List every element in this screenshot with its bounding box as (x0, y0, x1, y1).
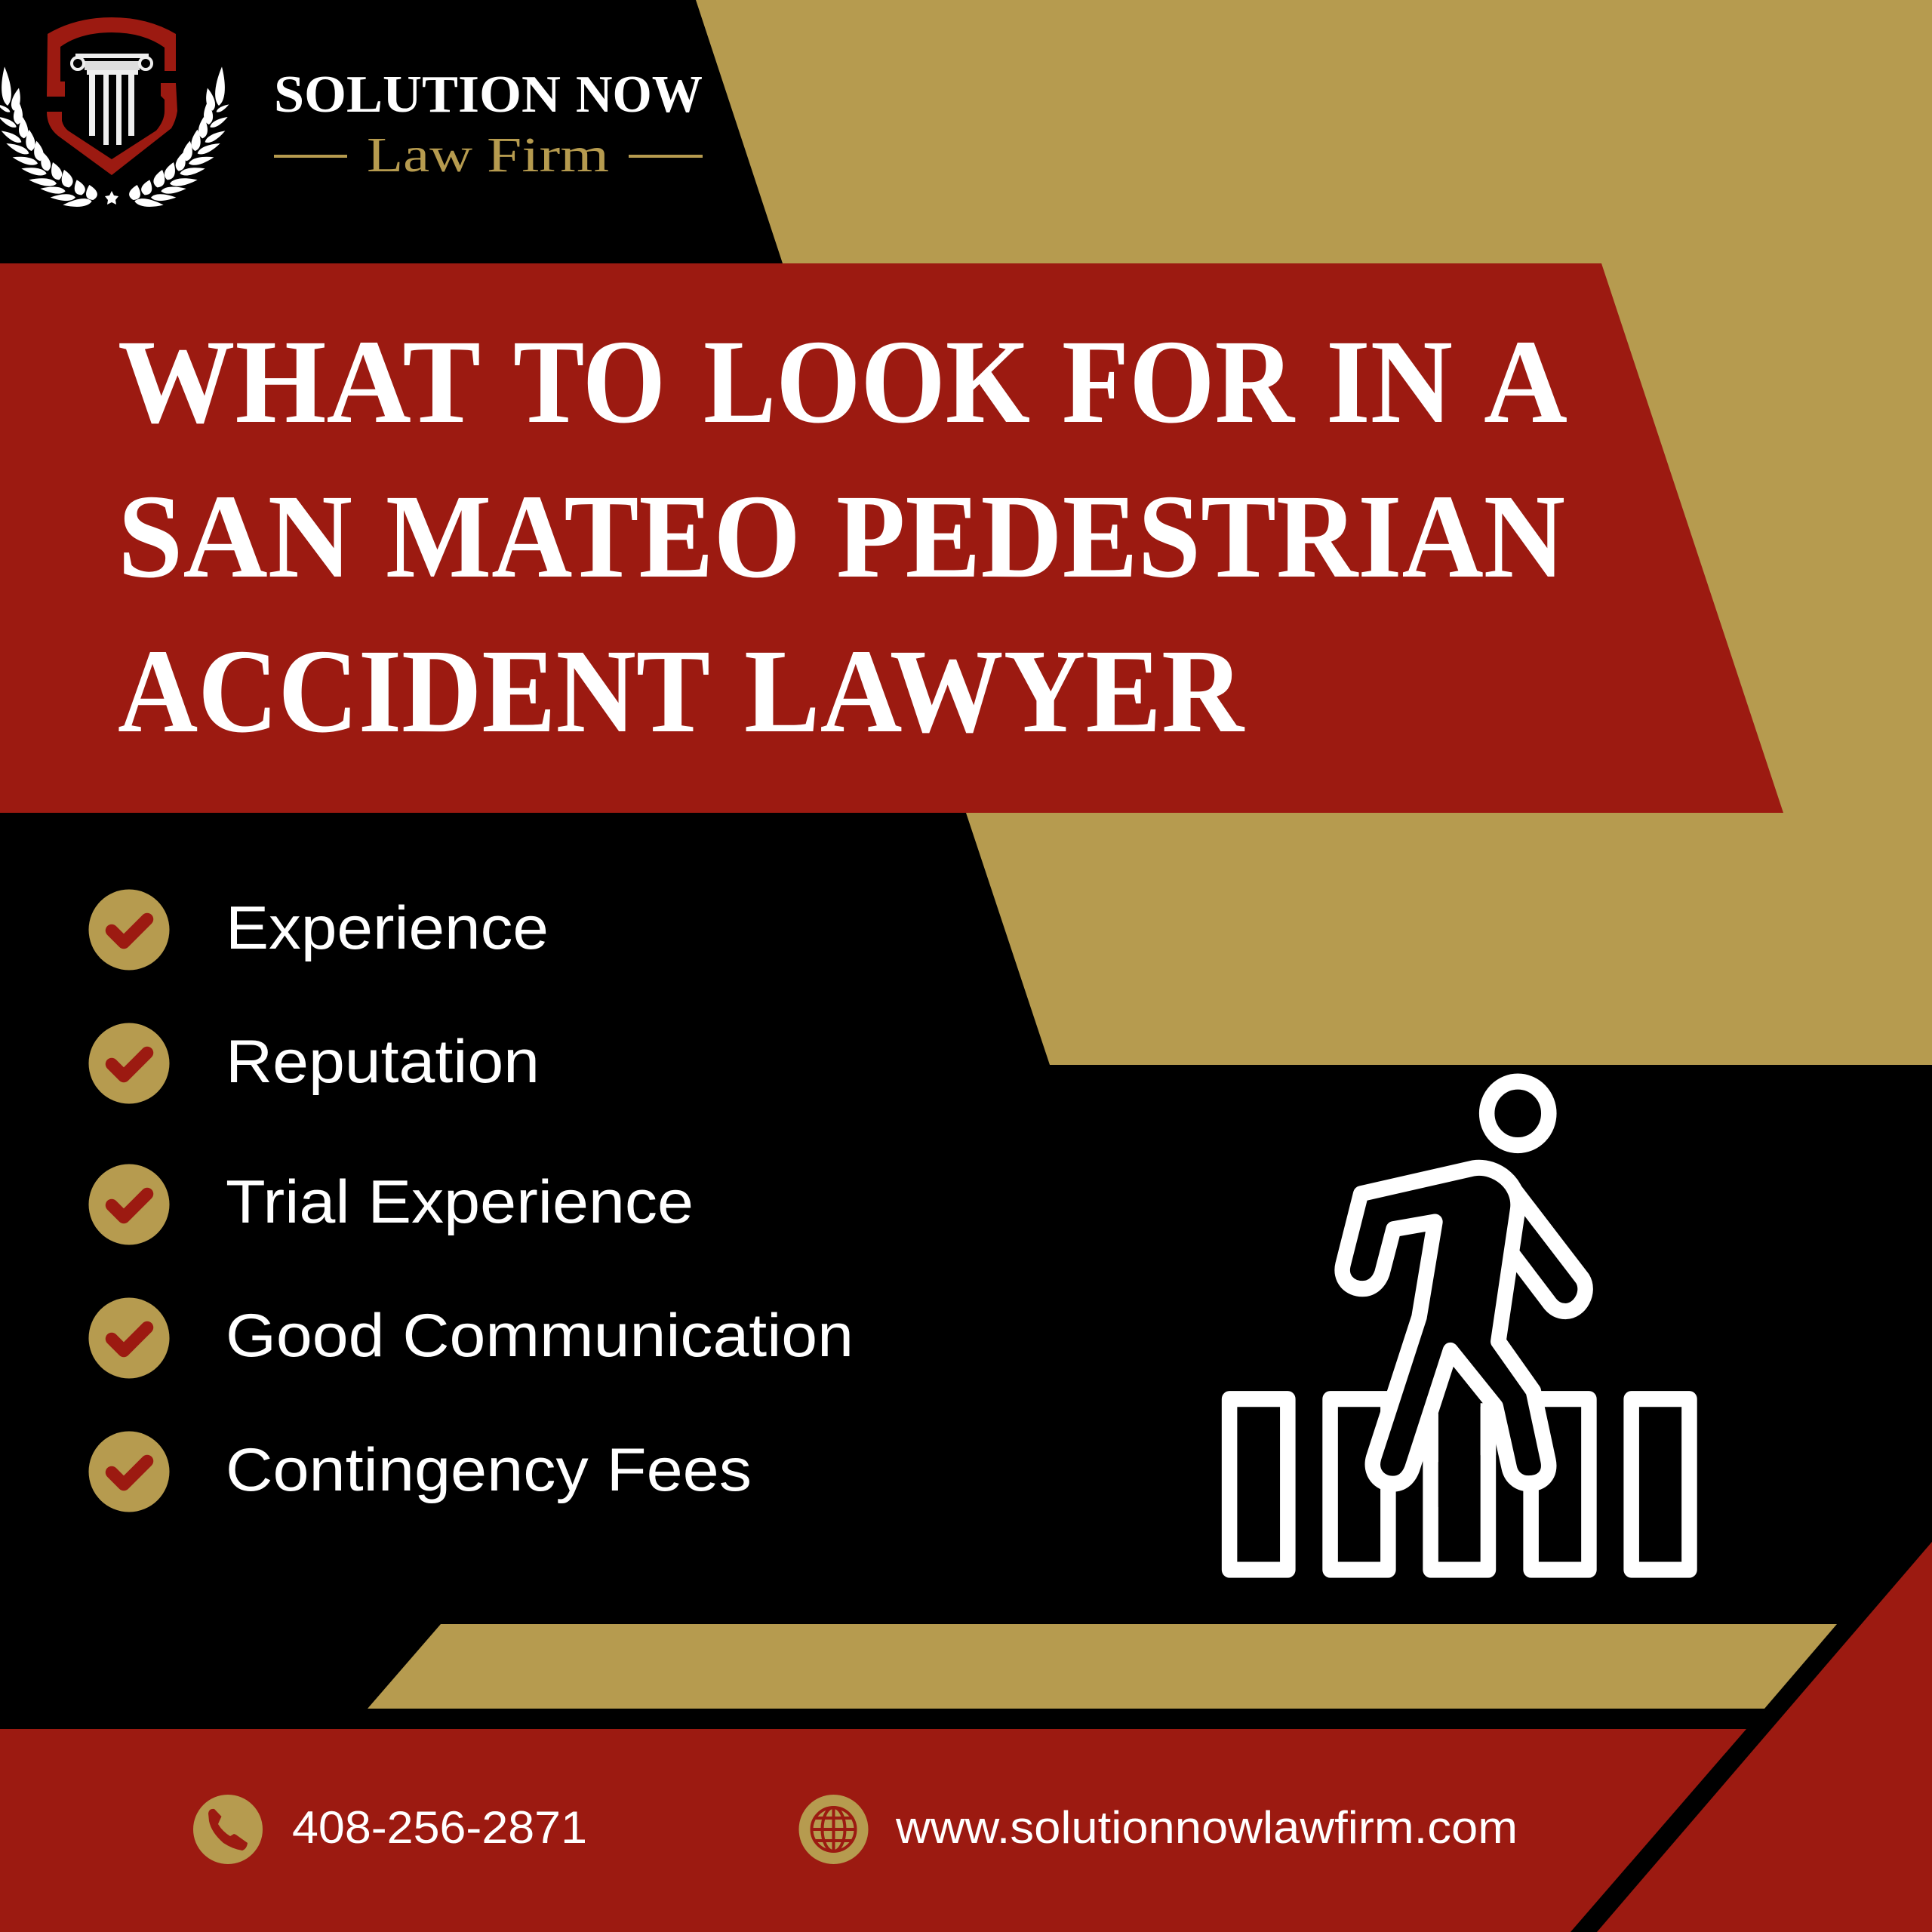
item: trial experience: Trial Experience (226, 1168, 694, 1236)
logo wordmark (274, 66, 703, 124)
body (1343, 1168, 1549, 1484)
item: good communication (89, 1298, 854, 1378)
icon: phone (193, 1795, 263, 1864)
red corner triangle (1597, 1542, 1932, 1932)
footer contact (193, 1795, 1518, 1864)
logo icon: right laurel (128, 66, 230, 209)
phone contact (193, 1795, 587, 1864)
logo tagline (367, 128, 609, 183)
item: good communication: Good Communication (226, 1302, 854, 1370)
title line 1: A (1484, 315, 1567, 448)
website url: www.solutionnowlawfirm.com (895, 1802, 1518, 1853)
phone number: 408-256-2871 (292, 1802, 587, 1853)
rest of centre stripe (1431, 1407, 1488, 1462)
item: reputation: Reputation (226, 1028, 540, 1096)
logo wordmark: SOLUTION (274, 66, 561, 124)
title line 1: IN (1326, 315, 1453, 448)
title line 3: LAWYER (744, 625, 1245, 758)
logo tagline: Law (367, 128, 472, 183)
logo tagline rules (274, 155, 703, 158)
title line 2: PEDESTRIAN (836, 470, 1565, 603)
title line 1 (118, 315, 1567, 448)
checklist (89, 889, 854, 1512)
item: contingency fees (89, 1431, 752, 1512)
crotch cutout (1438, 1367, 1480, 1507)
trailing arm (1507, 1180, 1586, 1312)
title line 2: MATEO (386, 470, 801, 603)
crosswalk stripes (1229, 1399, 1689, 1570)
website contact (798, 1795, 1518, 1864)
red footer band (0, 1729, 1746, 1932)
title line 1: TO (513, 315, 666, 448)
item: trial experience (89, 1164, 694, 1245)
logo icon: left laurel (0, 66, 99, 209)
logo tagline: Firm (487, 128, 609, 183)
gold lower band (368, 1624, 1837, 1709)
item: contingency fees: Contingency Fees (226, 1436, 752, 1504)
logo icon: star (105, 191, 118, 205)
logo wordmark: NOW (576, 66, 703, 124)
logo icon: column (72, 54, 152, 145)
title line 3: ACCIDENT (118, 625, 710, 758)
title line 2: SAN (118, 470, 352, 603)
icon: globe (798, 1795, 868, 1864)
title line 2 (118, 470, 1565, 603)
title line 1: WHAT (118, 315, 481, 448)
head (1487, 1081, 1549, 1146)
icon: pedestrian on crosswalk (1229, 1081, 1689, 1570)
red title banner (0, 263, 1783, 813)
title line 3 (118, 625, 1245, 758)
item: experience (89, 889, 549, 971)
item: reputation (89, 1023, 540, 1103)
title (118, 315, 1567, 758)
item: experience: Experience (226, 894, 549, 962)
logo (0, 17, 703, 209)
title line 1: FOR (1062, 315, 1296, 448)
title line 1: LOOK (703, 315, 1030, 448)
gold upper right shape (696, 0, 1932, 1065)
logo icon: shield (47, 17, 177, 175)
